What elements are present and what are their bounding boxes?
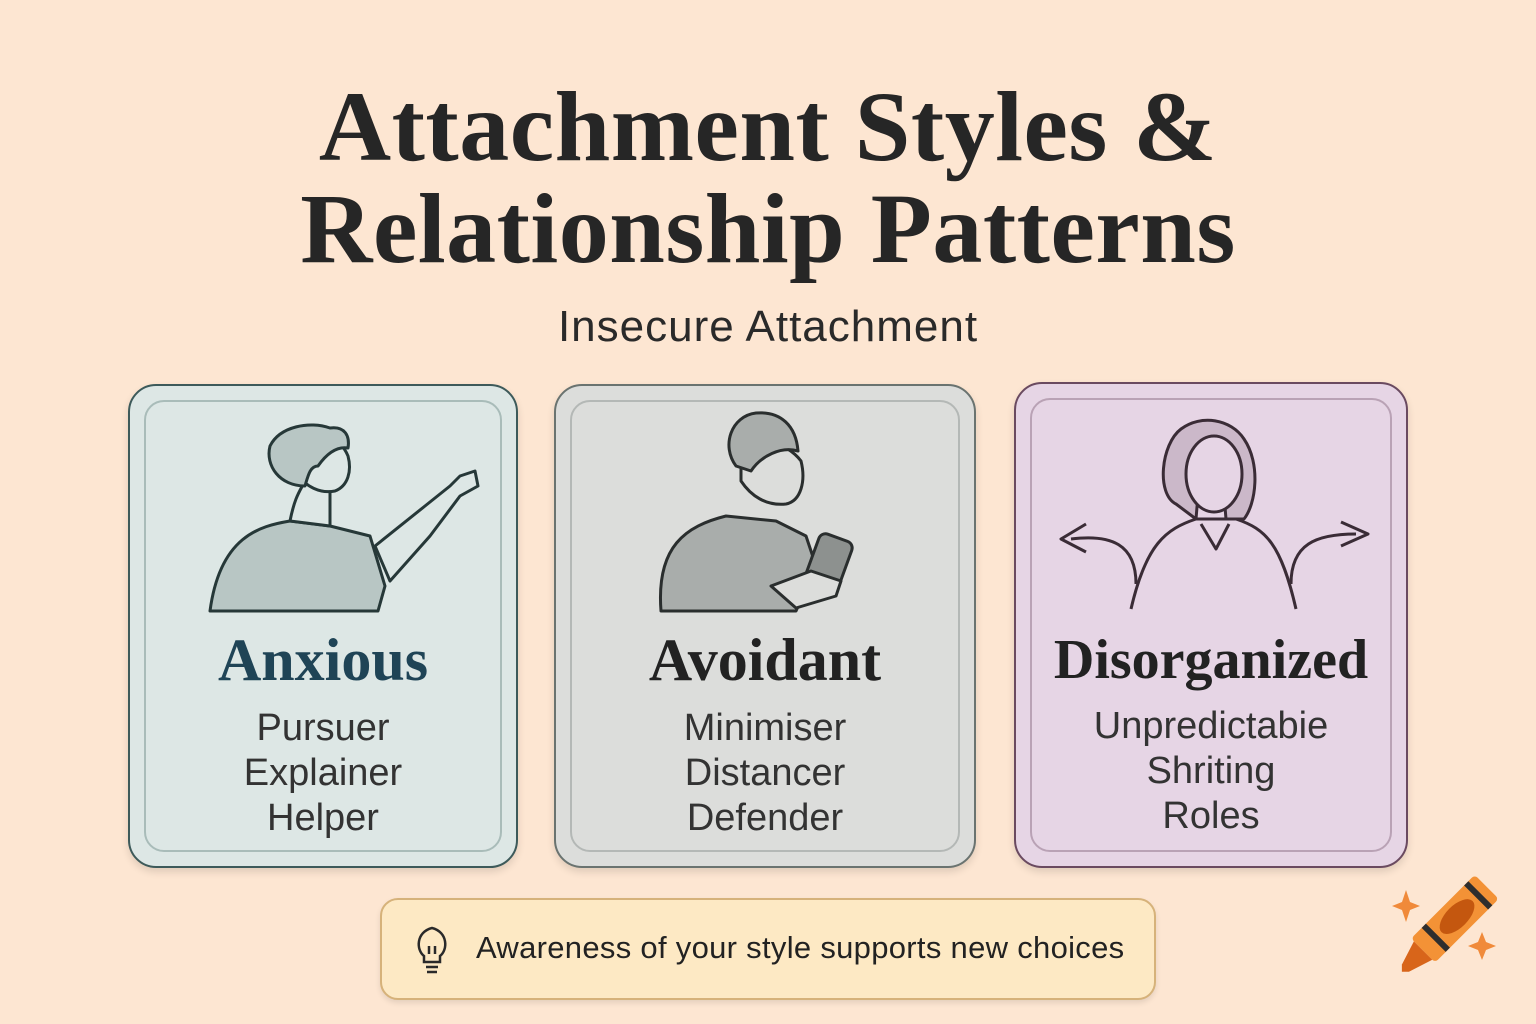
text: roles: Unpredictabie — [1094, 705, 1328, 747]
heading: Avoidant: Avoidant — [649, 627, 881, 693]
text: roles: Helper — [267, 797, 379, 839]
text: roles — [1094, 705, 1328, 837]
icon: person reaching — [208, 424, 480, 612]
text: roles — [684, 707, 846, 839]
text: roles: Explainer — [244, 752, 402, 794]
text: roles: Roles — [1162, 795, 1260, 837]
title — [300, 71, 1236, 284]
icon: person with split arrows — [1059, 418, 1370, 610]
title: Relationship Patterns — [300, 173, 1236, 284]
text: roles: Shriting — [1147, 750, 1275, 792]
icon: person with phone — [658, 411, 854, 612]
panel: disorganized — [1014, 382, 1408, 868]
panel: anxious — [128, 384, 518, 868]
callout — [380, 898, 1156, 1000]
text: roles: Defender — [687, 797, 843, 839]
text: roles: Distancer — [685, 752, 845, 794]
panel: avoidant — [554, 384, 976, 868]
title: Attachment Styles & — [319, 71, 1217, 182]
text: roles — [244, 707, 402, 839]
subtitle: Insecure Attachment — [558, 302, 978, 351]
text: roles: Pursuer — [256, 707, 390, 749]
icon: crayon — [1392, 876, 1498, 972]
text: roles: Minimiser — [684, 707, 846, 749]
heading: Anxious: Anxious — [218, 627, 428, 693]
icon: light bulb — [418, 926, 446, 974]
text: callout message: Awareness of your style supports new choices — [476, 930, 1124, 965]
heading: Disorganized: Disorganized — [1054, 629, 1368, 691]
